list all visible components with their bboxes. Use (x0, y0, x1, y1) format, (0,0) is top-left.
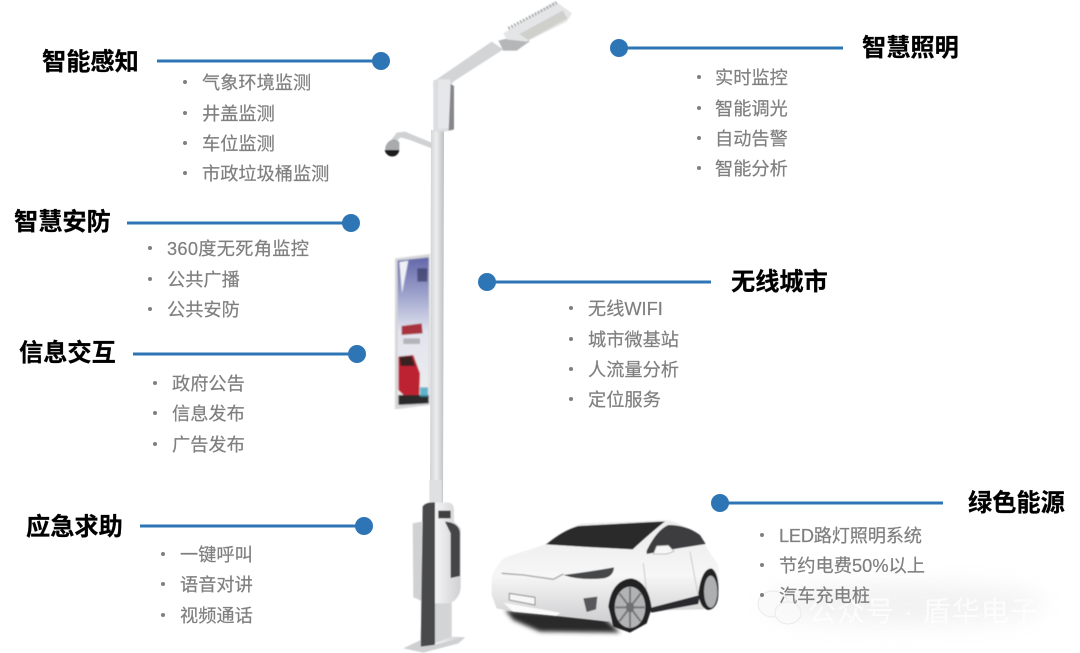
bullet list: 节约电费50%以上 (779, 556, 925, 576)
heading: 无线城市 (731, 268, 828, 296)
ground shadow (505, 610, 620, 633)
bullet list: 定位服务 (588, 390, 661, 410)
bullet list: 人流量分析 (588, 360, 679, 380)
connector line and dot (711, 494, 943, 512)
car body (492, 520, 719, 622)
heading: 绿色能源 (968, 490, 1065, 517)
heading: 智慧安防 (14, 209, 111, 236)
bullet list: 无线WIFI (588, 299, 663, 319)
bumper light strip (503, 603, 560, 616)
bullet list: 广告发布 (172, 435, 245, 455)
bullet list (760, 526, 925, 606)
bullet list: 实时监控 (715, 68, 788, 88)
bullet list: 城市微基站 (588, 330, 679, 350)
connector line and dot (133, 345, 366, 363)
panel: 应急求助 (26, 514, 373, 626)
illustration: white electric SUV (492, 520, 719, 633)
panel: 智能感知 (42, 48, 390, 184)
panel: 无线城市 (478, 268, 828, 410)
bullet list (183, 73, 329, 184)
icon: dome security camera (385, 132, 432, 156)
bullet list: 气象环境监测 (202, 73, 311, 93)
bullet list: 一键呼叫 (180, 545, 253, 565)
watermark haze (765, 584, 1045, 624)
panel: 信息交互 (19, 339, 366, 455)
heading: 智慧照明 (862, 35, 959, 62)
door line (643, 552, 698, 607)
connector line and dot (140, 517, 373, 535)
licence plate (509, 593, 535, 605)
heading: 信息交互 (19, 339, 116, 367)
base charging cabinet (403, 480, 465, 653)
bullet list: 汽车充电桩 (779, 586, 870, 606)
heading: 应急求助 (26, 514, 123, 541)
pole shaft (430, 130, 444, 505)
bullet list: 信息发布 (172, 404, 245, 424)
hood crease (502, 573, 563, 579)
panel: 绿色能源 (711, 490, 1065, 606)
bullet list: 智能调光 (715, 99, 788, 119)
mirror (653, 545, 674, 554)
bullet list: 语音对讲 (180, 575, 253, 595)
illustration: smart street light pole (385, 1, 572, 653)
icon: chat bubbles (758, 591, 801, 624)
bullet list (697, 68, 788, 179)
front intake (583, 597, 597, 612)
bullet list: 公共广播 (167, 270, 240, 290)
bullet list: 市政垃圾桶监测 (202, 164, 329, 184)
bullet list (148, 239, 309, 320)
panel: 智慧照明 (610, 35, 959, 179)
bullet list (569, 299, 679, 410)
side windows (647, 525, 706, 554)
bullet list: 政府公告 (172, 374, 245, 394)
bullet list (161, 545, 253, 626)
connector line and dot (610, 39, 843, 57)
bullet list (153, 374, 245, 455)
bullet list: 视频通话 (180, 606, 253, 626)
panel: 智慧安防 (14, 209, 360, 320)
bullet list: 井盖监测 (202, 104, 275, 124)
connector line and dot (157, 52, 390, 70)
connector line and dot (127, 214, 360, 232)
bullet list: LED路灯照明系统 (779, 526, 922, 546)
bullet list: 公共安防 (167, 300, 240, 320)
windshield (546, 521, 665, 549)
bullet list: 360度无死角监控 (167, 239, 309, 259)
lamp arm and light head (433, 1, 572, 132)
front wheel (608, 578, 652, 633)
watermark text: 公众号 · 盾华电子 (808, 596, 1039, 627)
headlight (563, 567, 614, 579)
bullet list: 智能分析 (715, 159, 788, 179)
bullet list: 自动告警 (715, 129, 788, 149)
heading: 智能感知 (42, 48, 139, 76)
advertising light box (395, 254, 430, 409)
connector line and dot (478, 273, 711, 291)
bullet list: 车位监测 (202, 134, 275, 154)
watermark (758, 584, 1045, 627)
sill (648, 595, 700, 613)
rear wheel (698, 568, 718, 610)
